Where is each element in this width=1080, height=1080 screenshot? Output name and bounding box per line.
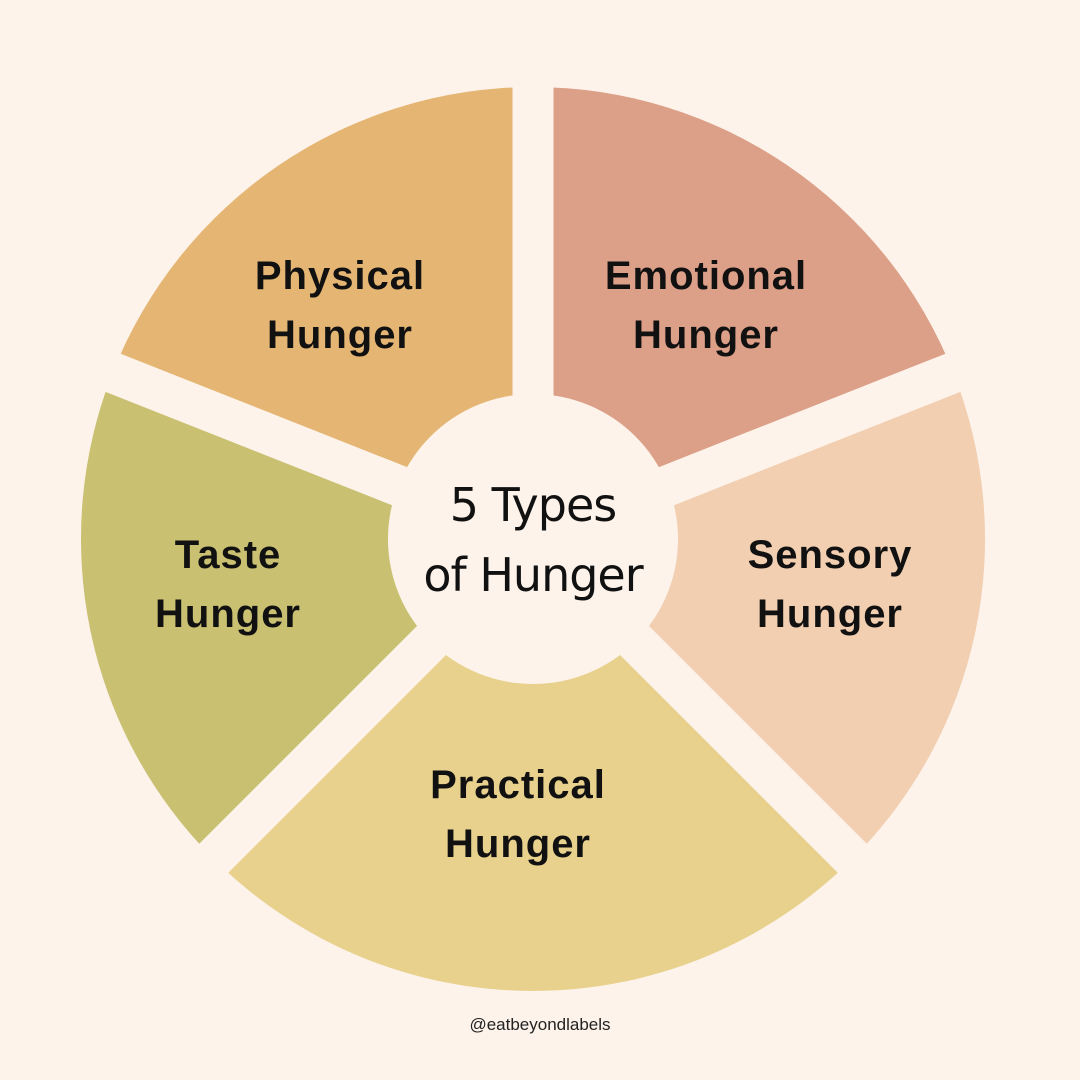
label: physical: Physical xyxy=(255,254,425,298)
label: physical xyxy=(255,254,425,357)
label: practical: Practical xyxy=(430,763,606,807)
segment: taste xyxy=(81,373,533,859)
center title: 5 Types xyxy=(450,478,616,532)
label: practical: Hunger xyxy=(445,822,591,866)
label: taste: Hunger xyxy=(155,592,301,636)
label: practical xyxy=(430,763,606,866)
label: taste: Taste xyxy=(175,533,281,577)
label: sensory: Hunger xyxy=(757,592,903,636)
center title xyxy=(423,478,644,602)
label: emotional: Emotional xyxy=(605,254,807,298)
segment: sensory xyxy=(533,373,985,859)
label: taste xyxy=(155,533,301,636)
center title: of Hunger xyxy=(423,548,643,602)
segment: emotional xyxy=(533,87,953,539)
label: physical: Hunger xyxy=(267,313,413,357)
center circle xyxy=(388,394,678,684)
label: sensory xyxy=(748,533,912,636)
footer handle: @eatbeyondlabels xyxy=(469,1015,611,1034)
segment: practical xyxy=(213,539,853,991)
label: emotional xyxy=(605,254,807,357)
label: emotional: Hunger xyxy=(633,313,779,357)
label: sensory: Sensory xyxy=(748,533,912,577)
segment: physical xyxy=(113,87,533,539)
